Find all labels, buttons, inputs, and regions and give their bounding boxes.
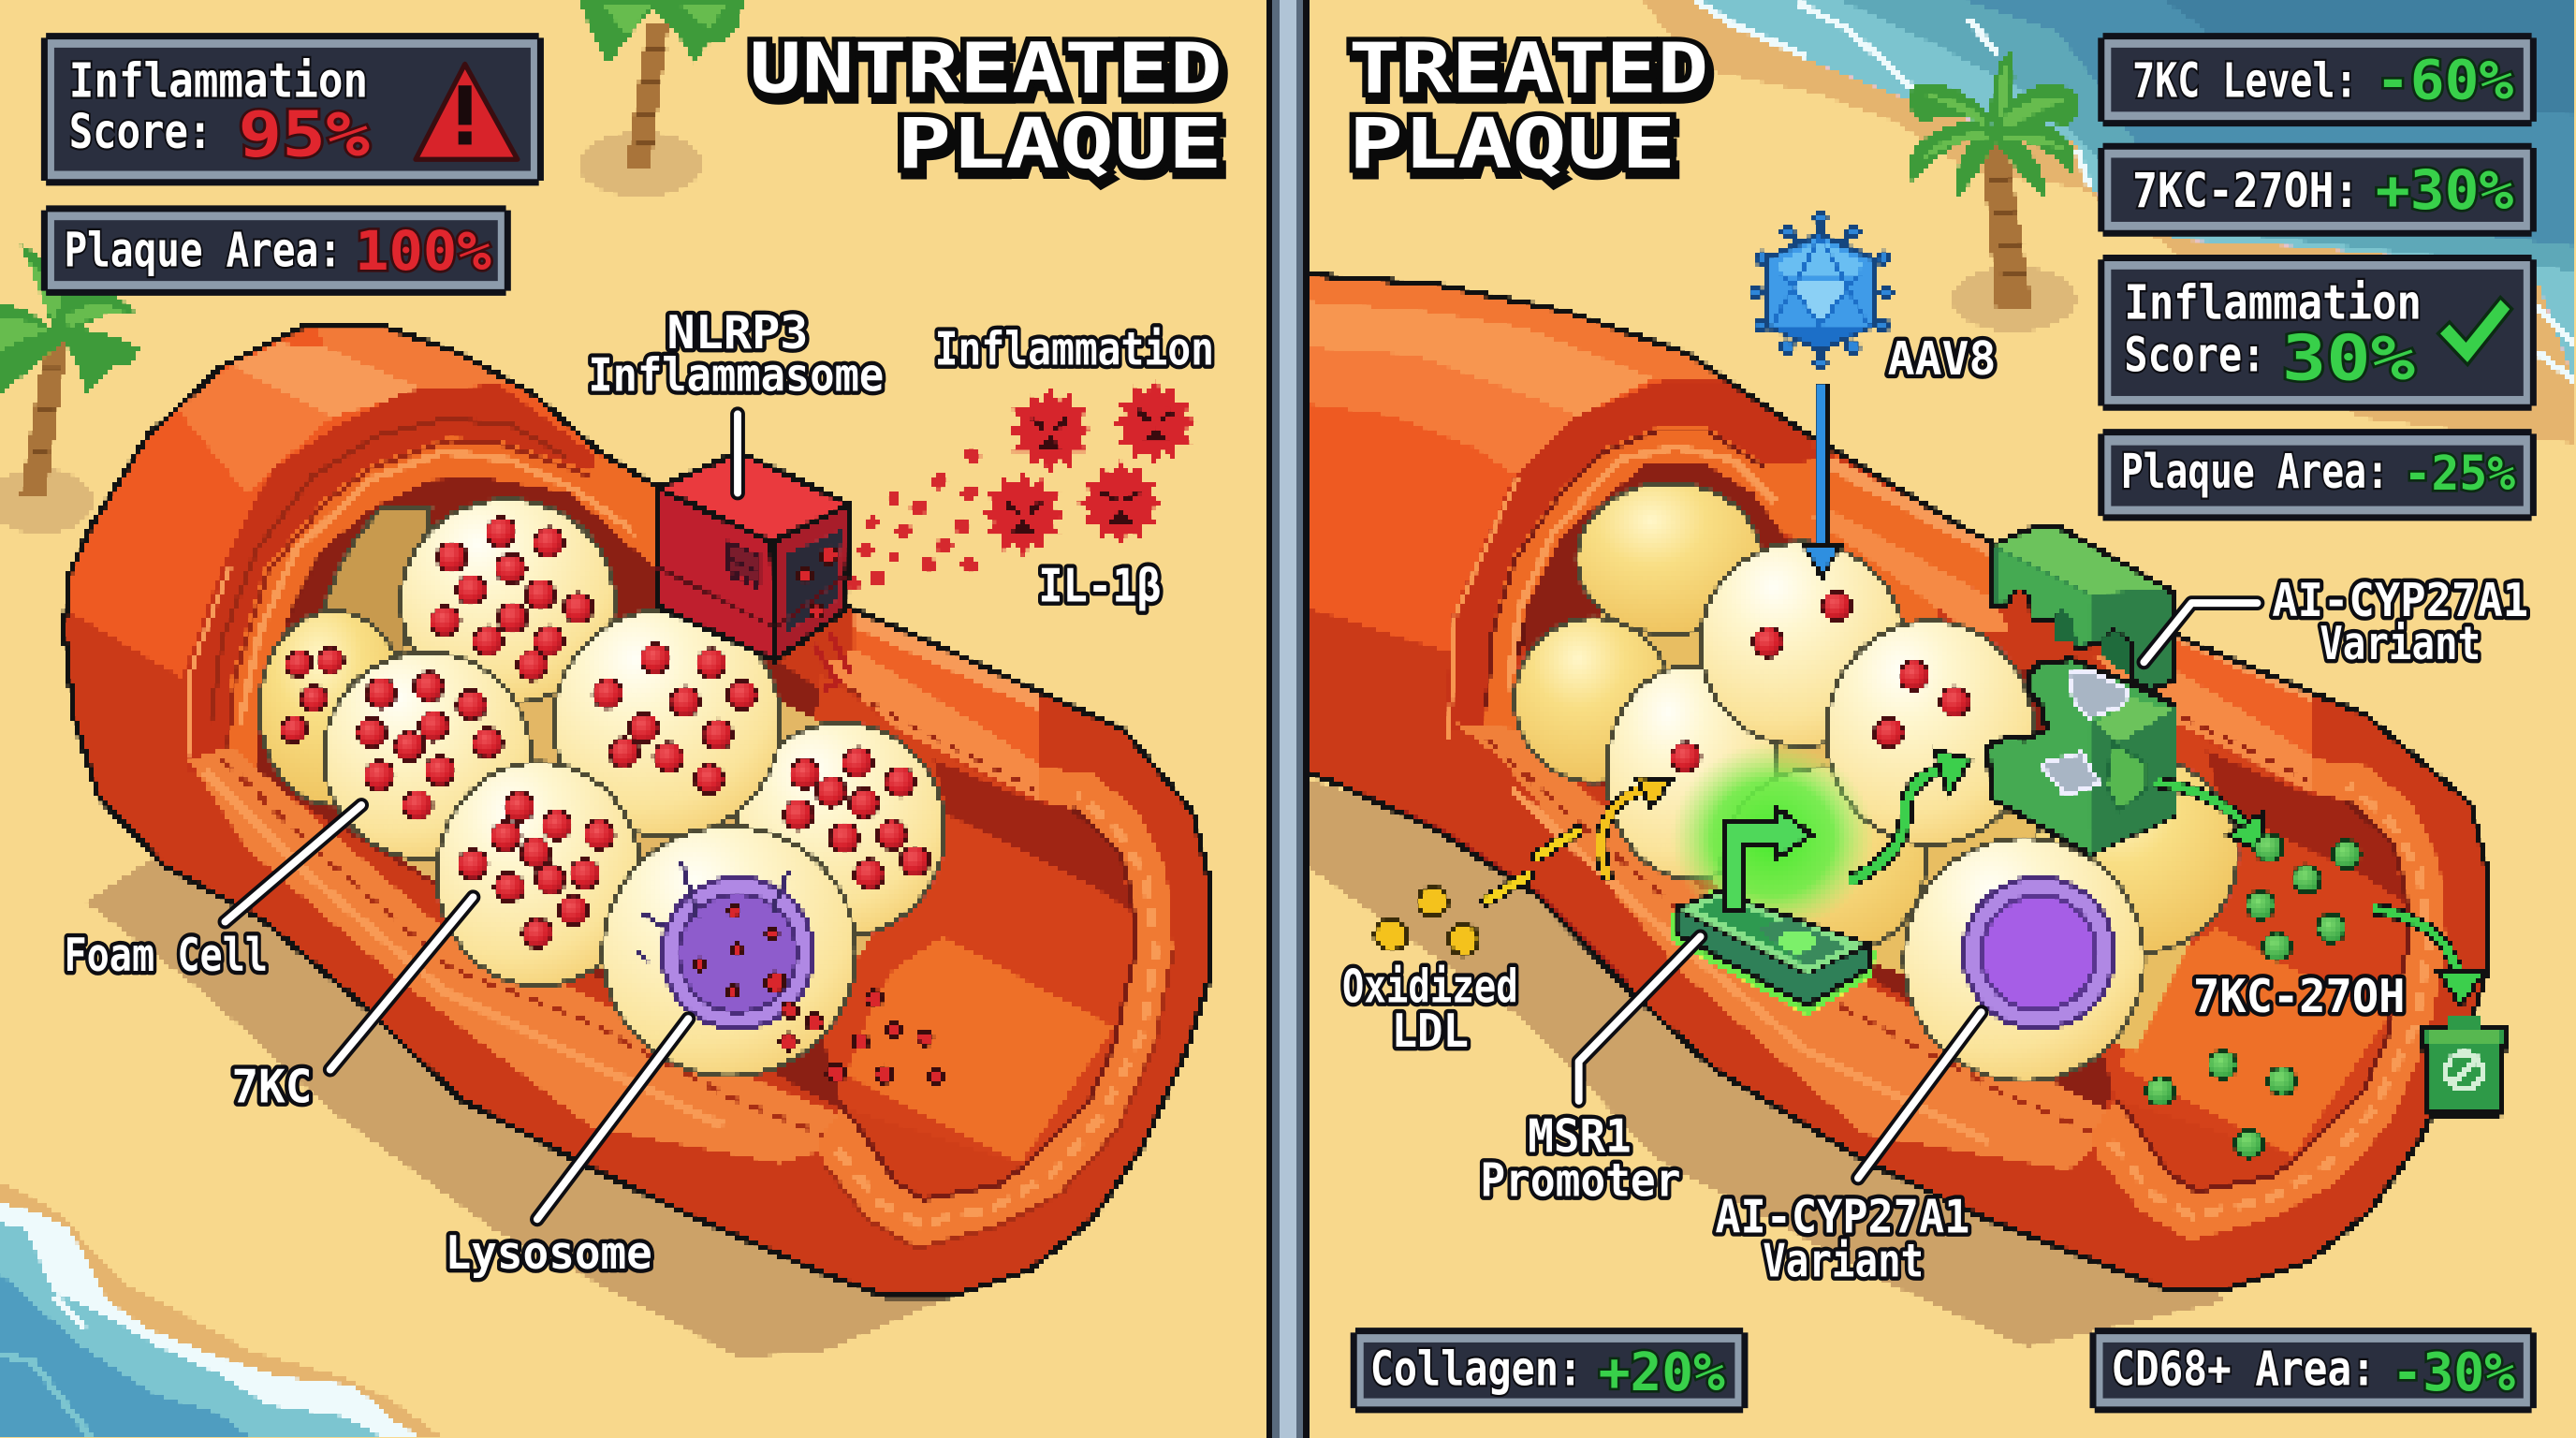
IL-1β particles [848,447,981,590]
green glow [1669,742,1876,1016]
label: inflammation: Inflammation [935,322,1214,376]
label: AI-CYP27A1 variant bottom [1715,1012,1982,1288]
title: untreated plaque: PLAQUE [897,105,1222,184]
label: IL-1β: IL-1β [1038,558,1162,612]
foam cell center [553,609,781,836]
label: AAV8: AAV8 [1888,331,1996,386]
left artery [50,312,1232,1314]
label: NLRP3 inflammasome [588,305,884,493]
pale cell center low [1721,768,1925,958]
entry cell [1701,542,1904,746]
wall right of box [855,611,1038,764]
7KC droplets [281,518,929,948]
ring [225,437,654,772]
foam cell right [738,723,944,936]
title: untreated plaque: UNTREATED [753,36,1225,115]
right beach water [1643,0,2576,444]
stat box: collagen: Collagen: [1370,1343,1582,1398]
stat box: inflammation score 95%: Score: [69,105,212,160]
tan interior behind cells [1560,542,2217,1051]
stat box: CD68+ area [2089,1328,2537,1413]
rim [197,384,577,646]
label: 7KC [231,897,473,1114]
lumen [1519,465,2202,1117]
lysosome [637,862,944,1083]
title: treated plaque: PLAQUE [1352,111,1679,191]
sand shadow right [1306,779,2224,1347]
outer wall [70,328,618,679]
wall to box [590,454,655,543]
wall right of arrow [1828,455,1995,600]
label: lysosome [446,1019,688,1280]
stat box: inflammation score 95%: 95% [238,98,370,171]
ring [1486,427,1939,772]
foam cell lower [437,762,640,986]
rim [1444,381,1821,729]
stat box: collagen: +20% [1599,1343,1725,1403]
end rim [818,768,1173,1249]
stat box: plaque area -25%: Plaque Area: [2121,445,2389,500]
title: treated plaque: TREATED [1352,36,1712,115]
label: AI-CYP27A1 variant bottom: AI-CYP27A1 [1715,1189,1969,1243]
left yellow cell [1515,618,1673,782]
label: MSR1 promoter [1480,936,1701,1208]
label: AI-CYP27A1 variant bottom: Variant [1763,1234,1924,1288]
label: AI-CYP27A1 variant top [2144,573,2528,670]
icon: check mark [2438,298,2512,365]
NLRP3 inflammasome box [657,452,851,690]
stat box: inflammation score 95%: Inflammation [69,54,368,110]
stat box: inflammation score 30%: 30% [2282,321,2415,394]
stat box: inflammation score 95% [41,33,544,185]
enzyme [1988,526,2175,855]
left beach water [0,1181,444,1438]
stat box: 7KC level: -60% [2376,48,2513,111]
MSR1 promoter [1676,809,1869,1005]
stat box: 7KC-27OH: 7KC-27OH: [2132,164,2359,219]
foam cell with lysosome [603,827,856,1077]
inflammation viruses [981,367,1210,557]
back yellow cell [1577,483,1761,634]
icon: warning triangle [416,64,518,159]
enzyme top jaw [1993,526,2175,690]
palm tree right [1908,50,2078,309]
stat box: collagen [1351,1328,1748,1413]
enzyme bottom jaw [1988,659,2175,855]
label: foam cell: Foam Cell [64,928,268,982]
trash bin [2422,1017,2507,1114]
label: AI-CYP27A1 variant top: AI-CYP27A1 [2272,573,2528,627]
end rim [2091,759,2446,1240]
remaining 7KC droplets [1671,592,1969,772]
label: oxidized LDL: LDL [1392,1004,1469,1058]
label: 7KC: 7KC [231,1060,312,1114]
orange lip [1454,723,2119,1170]
LDL uptake arrows [1486,777,1673,901]
orange lip [189,746,846,1164]
stat box: 7KC-27OH: +30% [2376,158,2513,222]
sand shadow left [85,856,944,1357]
title: untreated plaque: UNTREATED [749,29,1222,109]
stat box: CD68+ area: -30% [2392,1343,2515,1403]
back cell [312,509,431,690]
7KC-27OH particles [2146,834,2360,1157]
stat box: plaque area 100%: Plaque Area: [64,223,342,278]
label: AI-CYP27A1 variant top: Variant [2320,616,2481,670]
title: treated plaque [1349,29,1712,191]
stat box: plaque area 100% [41,205,511,296]
stat box: inflammation score 30% [2098,255,2537,411]
title: treated plaque: PLAQUE [1349,105,1676,184]
stat box: CD68+ area: CD68+ Area: [2111,1343,2376,1398]
label: foam cell [64,805,361,982]
AAV8 virus [1750,213,1892,369]
foam cell small [259,611,407,805]
panel divider [1266,0,1310,1438]
AAV8 arrow [1804,383,1840,579]
foam cell mid [324,653,531,859]
clean lysosome [1963,877,2115,1029]
palm shadows [0,131,2076,534]
cell with droplets [1827,621,2034,844]
label: NLRP3 inflammasome: Inflammasome [588,348,884,403]
right cells [1515,483,2237,1081]
label: lysosome: Lysosome [446,1225,652,1280]
label: 7KC-27OH: 7KC-27OH [2193,969,2405,1023]
stat box: plaque area -25%: -25% [2404,447,2515,502]
disposal arrow [2372,909,2484,1005]
stat box: inflammation score 30%: Inflammation [2124,275,2422,330]
lumen [256,477,842,1109]
product arrow [2156,782,2264,855]
palm tree left [0,243,139,498]
stat box: 7KC-27OH [2098,143,2537,237]
label: MSR1 promoter: MSR1 [1528,1108,1632,1163]
title: untreated plaque: PLAQUE [900,111,1225,191]
right artery [1298,263,2513,1314]
green pathway arrow [1850,749,1971,881]
stat box: plaque area -25% [2098,429,2537,521]
cell with lysosome [1904,838,2144,1081]
wall right of enzyme [2128,603,2311,756]
stat box: 7KC level: 7KC Level: [2132,54,2358,110]
foam cell top [401,500,614,703]
right back cell [2034,756,2237,953]
title: untreated plaque [749,29,1225,191]
stat box: 7KC level [2098,33,2537,126]
title: treated plaque: TREATED [1349,29,1708,109]
tan interior behind cells [312,526,920,1019]
outer wall [1298,263,1840,653]
label: MSR1 promoter: Promoter [1480,1153,1680,1208]
palm tree top [578,0,742,168]
oxidized LDL particles [1375,888,1479,956]
end interior [788,674,1135,1199]
label: oxidized LDL: Oxidized [1342,960,1518,1014]
end interior [2062,666,2408,1191]
pale cell lower left [1606,666,1778,879]
stat box: inflammation score 30%: Score: [2124,329,2265,384]
stat box: plaque area 100%: 100% [355,219,491,283]
label: NLRP3 inflammasome: NLRP3 [667,305,809,360]
left cells [259,500,944,1077]
label: oxidized LDL [1342,960,1518,1058]
